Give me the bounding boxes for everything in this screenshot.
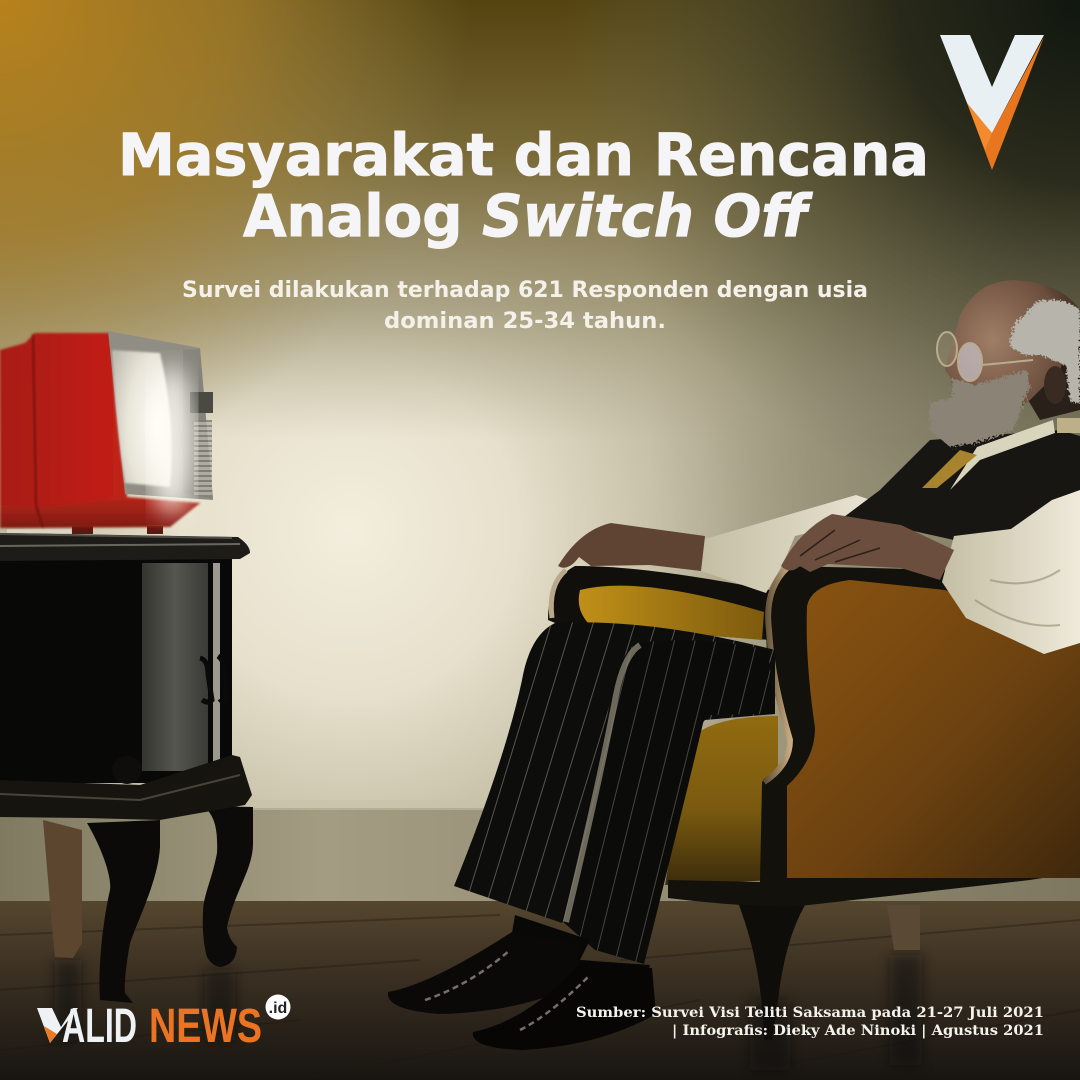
man (388, 280, 1080, 1050)
upper cushion (579, 586, 764, 640)
tv screen bezel (108, 331, 213, 500)
furniture reflections on floor (55, 955, 922, 1070)
left shoe (388, 932, 580, 1014)
cabinet door (142, 563, 208, 771)
cabinet (0, 533, 253, 1003)
trouser crease (566, 645, 640, 922)
tv side panel (183, 349, 213, 499)
cabinet front leg (87, 820, 160, 1003)
right shirt sleeve (942, 490, 1080, 654)
cabinet handles (200, 656, 226, 702)
ear (1044, 366, 1066, 404)
logo: VALIDNEWS.id: .id (269, 1000, 287, 1017)
subtitle (182, 278, 868, 334)
left shirt sleeve (701, 495, 900, 593)
wooden floor (0, 901, 1080, 1080)
chair front leg (735, 895, 805, 1040)
skirting board (0, 800, 1080, 902)
back trouser leg (454, 622, 775, 923)
subtitle: Survei dilakukan terhadap 621 Responden dengan usia (182, 278, 868, 303)
left hand (558, 523, 705, 571)
socks (510, 915, 650, 990)
title: Analog Switch Off (243, 182, 814, 250)
tie (922, 450, 977, 488)
vest (840, 430, 1080, 540)
head (945, 280, 1080, 430)
title: Masyarakat dan Rencana (118, 121, 929, 189)
subtitle: dominan 25-34 tahun. (384, 309, 666, 334)
cabinet ornament (112, 756, 142, 784)
chair outer panel (787, 580, 1080, 878)
logo mark V (37, 1008, 78, 1043)
logo: VALIDNEWS.id: NEWS (149, 1000, 262, 1053)
tv screen (112, 350, 172, 487)
tv stand strip (7, 529, 71, 533)
tv body (0, 333, 200, 528)
chair left arm frame (548, 566, 770, 640)
source credit: Sumber: Survei Visi Teliti Saksama pada 21-27 Juli 2021 (576, 1005, 1044, 1021)
cabinet top (0, 533, 250, 561)
front trouser leg (562, 640, 775, 964)
logo: V mark (940, 35, 1044, 170)
red television (0, 331, 213, 534)
tv feet (72, 526, 163, 534)
cabinet back leg (43, 820, 82, 958)
chair frame (668, 566, 1080, 906)
source credit: | Infografis: Dieky Ade Ninoki | Agustus 2021 (672, 1023, 1044, 1039)
right hand (781, 514, 954, 580)
collar (950, 420, 1055, 490)
cabinet body (0, 555, 232, 783)
glasses (937, 332, 1033, 381)
beard (930, 370, 1030, 447)
hair back and ear (1020, 330, 1080, 420)
logo: VALIDNEWS.id (37, 994, 290, 1053)
chair wood highlight (764, 568, 790, 782)
title (118, 121, 929, 250)
chair back leg (887, 905, 920, 950)
white hair (1010, 300, 1080, 403)
source credit (576, 1005, 1044, 1039)
screen glow (150, 365, 194, 515)
shoe highlights (425, 950, 590, 1030)
logo: VALIDNEWS.id: ALID (62, 1000, 137, 1053)
seat cushion (665, 716, 778, 885)
armchair (548, 566, 1080, 1040)
cabinet right leg (203, 806, 253, 967)
cabinet base moulding (0, 755, 252, 820)
right shoe (473, 960, 656, 1050)
